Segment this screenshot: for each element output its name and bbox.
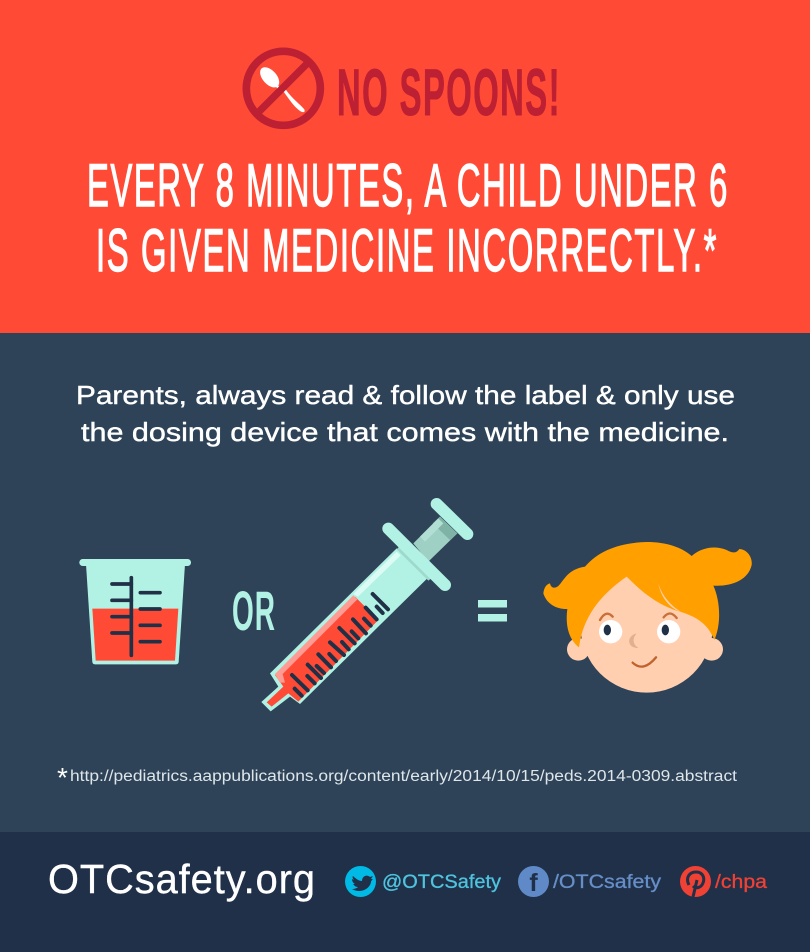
panel: footer: [0, 832, 810, 952]
panel: red header: [0, 0, 810, 333]
text: twitter handle: @OTCSafety: [382, 872, 502, 893]
text: parents instruction line 2: the dosing device that comes with the medicine.: [81, 417, 729, 447]
logo: OTCsafety.org: OTCsafety.org: [48, 856, 316, 902]
text: parents instruction line 1: Parents, always read & follow the label & only use: [76, 380, 735, 410]
icon: pinterest: [680, 866, 711, 897]
icon: no spoons: [246, 51, 320, 125]
icon: facebook: f: [529, 869, 538, 897]
panel: navy middle: [0, 333, 810, 832]
panel: red header: NO SPOONS!: [337, 55, 561, 129]
icon: facebook: [518, 866, 549, 897]
icon: syringe: [261, 504, 467, 711]
icon: child face: [543, 542, 752, 693]
icon: twitter: [345, 866, 376, 897]
icon: measuring cup: [79, 559, 191, 664]
text: facebook handle: /OTCsafety: [553, 872, 662, 893]
label: or: OR: [232, 579, 276, 642]
icon: equals sign: [478, 600, 507, 622]
footnote: source url: http://pediatrics.aappublications.org/content/early/2014/10/15/peds.2014-0309.abstract: [70, 768, 738, 785]
text: pinterest handle: /chpa: [715, 872, 767, 893]
footnote: asterisk: *: [57, 762, 68, 793]
